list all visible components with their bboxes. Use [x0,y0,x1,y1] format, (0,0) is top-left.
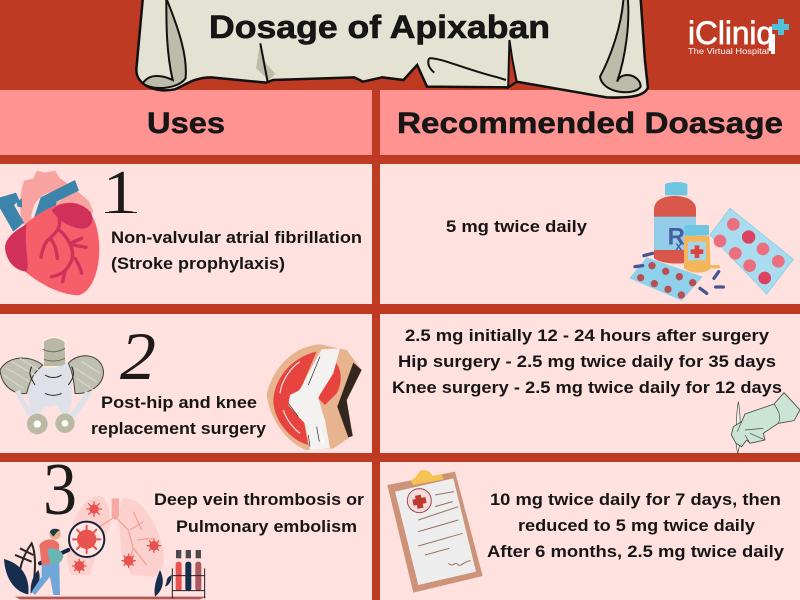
text: dosage 2 [392,326,782,397]
panel: dosage 2 [380,314,800,454]
number 2: 2 [120,318,156,394]
icon: medicine bottles and pills: x [675,239,682,253]
text: dosage 2: Hip surgery - 2.5 mg twice daily for 35 days [398,352,776,371]
text: use 3 description: Deep vein thrombosis or [154,490,364,509]
icon: heart [0,171,99,295]
panel: use 1 [0,159,372,304]
logo: iCliniq: The Virtual Hospital [688,46,769,56]
text: dosage 3: After 6 months, 2.5 mg twice daily [487,542,785,561]
icon: medicine bottles and pills [629,182,793,301]
icon: pelvis [0,338,103,434]
heading: uses: Uses [147,107,225,140]
icon: clipboard [387,470,483,593]
text: dosage 1: 5 mg twice daily [446,217,588,236]
panel: use 3 [0,449,372,600]
text: dosage 3: reduced to 5 mg twice daily [518,516,756,535]
icon: lungs and doctor with magnifier [4,496,207,599]
text: use 3 description: Pulmonary embolism [176,517,357,536]
text: use 1 description: Non-valvular atrial fibrillation [111,228,362,247]
text: use 2 description: replacement surgery [91,419,267,438]
text: dosage 2: 2.5 mg initially 12 - 24 hours after surgery [405,326,770,345]
banner: parchment scroll with title [136,0,648,98]
logo: iCliniq: iCliniq [688,15,774,51]
icon: knee anatomy [267,344,362,450]
panel: uses header [0,90,372,155]
title: Dosage of Apixaban [209,9,550,45]
text: use 1 description [111,228,362,273]
icon: gloved hand with scalpel [731,393,800,454]
icon: medicine bottles and pills: R [668,224,685,251]
text: use 1 description: (Stroke prophylaxis) [111,254,285,273]
panel: dosage 1 [380,164,800,304]
text: dosage 3 [487,490,785,561]
text: dosage 2: Knee surgery - 2.5 mg twice daily for 12 days [392,378,782,397]
panel: dosage 3 [380,462,800,600]
text: use 2 description [91,393,267,438]
panel: use 2 [0,314,372,453]
text: use 2 description: Post-hip and knee [101,393,257,412]
number 1: 1 [103,159,137,227]
text: use 3 description [154,490,364,536]
heading: recommended doasage: Recommended Doasage [397,107,783,140]
text: dosage 3: 10 mg twice daily for 7 days, then [490,490,781,509]
panel: recommended dosage header [380,90,800,155]
number 3: 3 [43,449,77,531]
